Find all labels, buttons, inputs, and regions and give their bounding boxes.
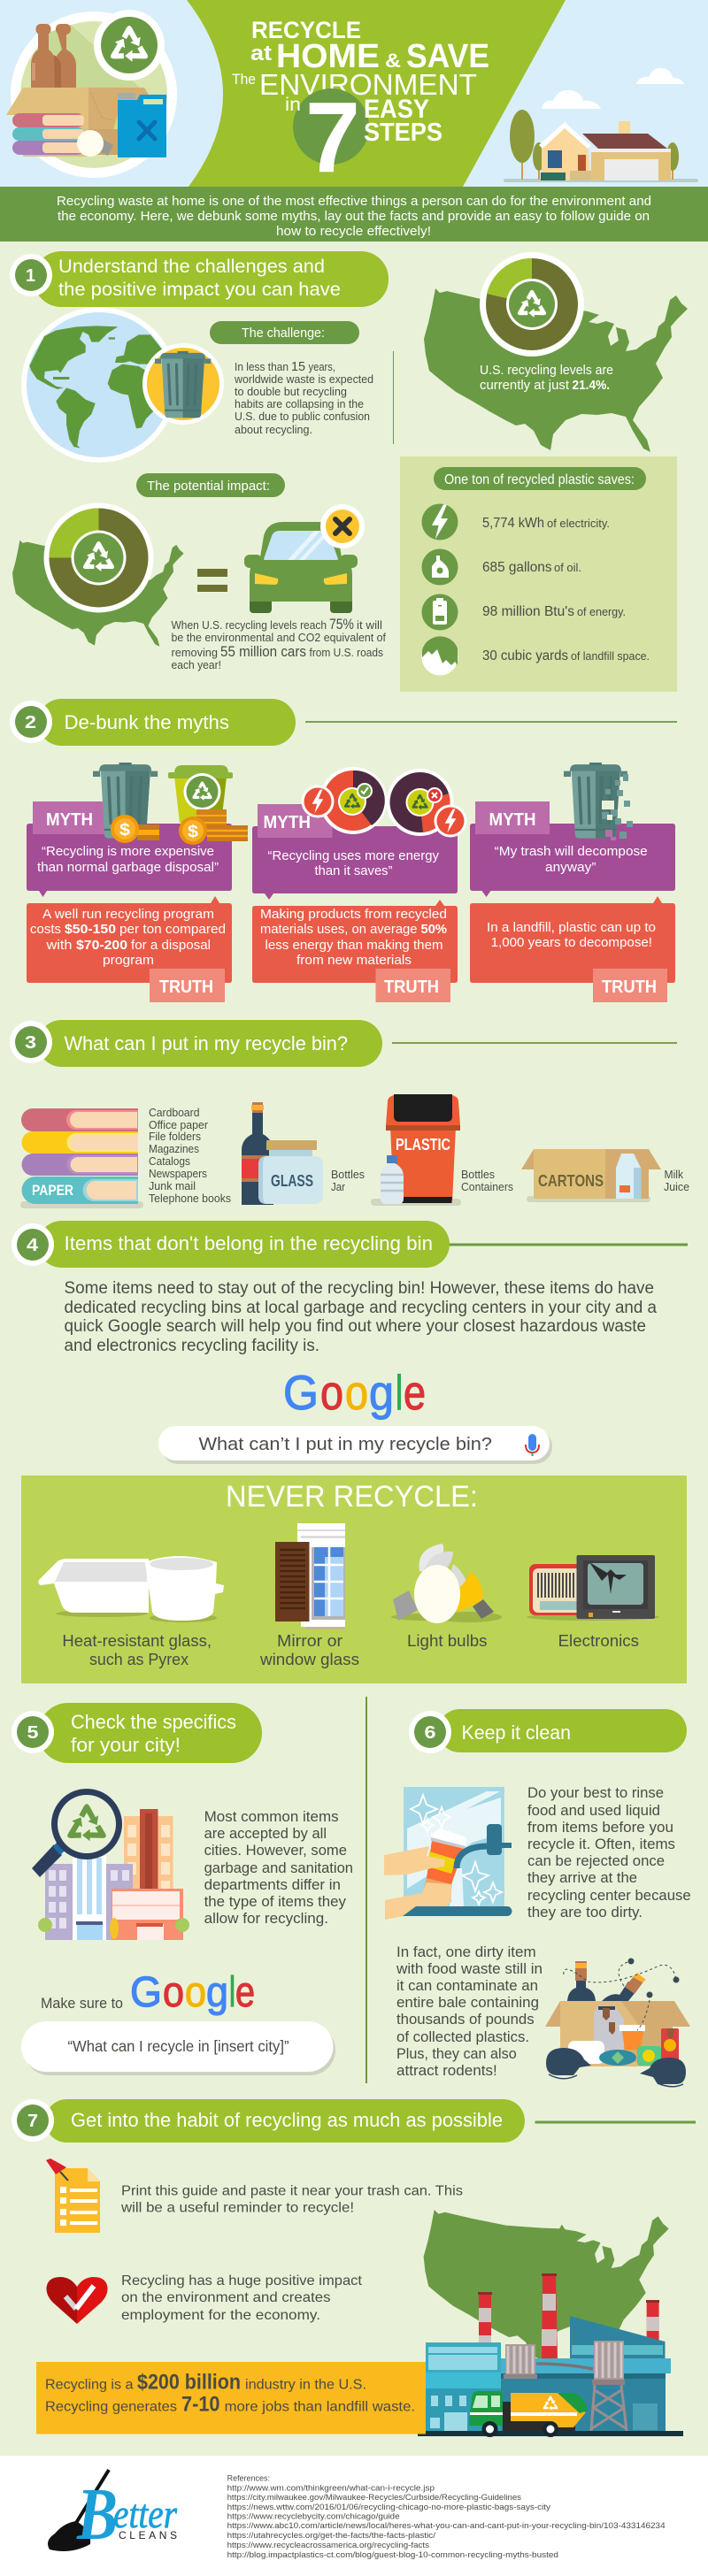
icon: landfill [421, 636, 458, 676]
glass list [331, 1168, 365, 1193]
stat lines: of landfill space. [571, 650, 650, 663]
US map with 21.4% donut [424, 252, 688, 452]
paper books [20, 1108, 143, 1208]
intro band [0, 187, 708, 242]
section 6 heading: Keep it clean [462, 1721, 571, 1744]
factory [418, 2273, 683, 2436]
section 1 heading: Understand the challenges and [58, 257, 325, 277]
section 7 heading: 7 [27, 2112, 38, 2131]
myth card 3 [470, 763, 675, 897]
title: EASY [364, 95, 429, 124]
truth card 2: Making products from recycled [260, 907, 447, 922]
intro band: how to recycle effectively! [276, 225, 431, 239]
paper list: Catalogs [149, 1154, 190, 1168]
truth card 2: materials uses, on average [260, 922, 418, 937]
google logo [283, 1365, 426, 1420]
myth card 1: MYTH [46, 810, 93, 830]
references: https://www.abc10.com/article/news/local/heres-what-you-can-and-cant-put-in-your-recycling-bin/103-433146234 [227, 2521, 666, 2531]
challenge text: about recycling. [235, 424, 312, 436]
title: SAVE [406, 38, 489, 75]
intro band: the economy. Here, we debunk some myths, lay out the facts and provide an easy to follow guide on [58, 210, 650, 224]
google logo: o [320, 1365, 343, 1420]
reminder text: will be a useful reminder to recycle! [120, 2201, 354, 2215]
myth card 2 [252, 767, 467, 900]
yellow stat bar: Recycling generates [45, 2400, 177, 2415]
section 5 text: cities. However, some [204, 1842, 347, 1859]
icon: trash can and coins [93, 763, 159, 843]
section 6 first text: they arrive at the [527, 1869, 637, 1886]
references: https://news.wttw.com/2016/01/06/recycling-chicago-no-more-plastic-bags-says-city [227, 2503, 550, 2512]
truth card 2: from new materials [296, 953, 412, 968]
truth card 3: In a landfill, plastic can up to [487, 920, 656, 935]
google logo: G [283, 1365, 319, 1420]
caption labels: window glass [259, 1651, 359, 1668]
logo: Better Cleans [48, 2470, 178, 2556]
section 5 text: are accepted by all [204, 1825, 327, 1842]
truth card 1: A well run recycling program [42, 907, 214, 922]
caption labels: Light bulbs [407, 1632, 487, 1650]
truth card 1: with [45, 938, 73, 953]
google logo small: g [206, 1969, 228, 2016]
potential impact text: When U.S. recycling levels reach [172, 618, 327, 632]
potential impact text: it will [357, 618, 382, 632]
section 6 second text: Plus, they can also [396, 2045, 517, 2062]
plastic bin [371, 1094, 461, 1206]
logo: Better Cleans: B [76, 2473, 118, 2556]
plastic list: Bottles [461, 1168, 495, 1181]
references: http://blog.impactplastics-ct.com/blog/guest-blog-10-common-recycling-myths-busted [227, 2550, 558, 2560]
section 6 second text: of collected plastics. [396, 2028, 529, 2045]
potential impact pill: The potential impact: [147, 479, 270, 494]
truth card 3: TRUTH [602, 978, 657, 997]
panel: one ton saves [400, 456, 677, 692]
section 5 text: allow for recycling. [204, 1910, 328, 1927]
title: in [285, 95, 301, 115]
icon: light bulbs [391, 1544, 502, 1623]
section 6 second text: In fact, one dirty item [396, 1944, 536, 1960]
section 2 heading: 2 [25, 713, 36, 732]
google logo small: o [163, 1969, 184, 2016]
section 5 heading: for your city! [71, 1734, 181, 1756]
impact text: employment for the economy. [121, 2308, 320, 2323]
challenge text: In less than [235, 361, 289, 373]
impact text [121, 2273, 363, 2323]
reminder text [120, 2183, 463, 2215]
section 1 heading: 1 [26, 266, 35, 286]
section 6 first text: can be rejected once [527, 1852, 665, 1869]
yellow stat bar: $200 billion [137, 2371, 241, 2394]
icon: electricity [421, 504, 458, 540]
section 3 heading: What can I put in my recycle bin? [64, 1032, 348, 1054]
car icon with X badge [244, 504, 365, 613]
paper list: Office paper [149, 1118, 209, 1131]
myth card 3: anyway” [545, 860, 596, 875]
logo: Better Cleans: etter [113, 2491, 178, 2536]
section 6 first text: they are too dirty. [527, 1904, 643, 1920]
paper list: Junk mail [149, 1179, 196, 1192]
truth card 1: $50-150 [65, 922, 116, 937]
section 6 second text: with food waste still in [396, 1960, 543, 1977]
caption labels: Mirror or [277, 1632, 342, 1650]
myth card 2: than it saves” [315, 863, 393, 878]
stat lines: 98 million Btu's [482, 604, 574, 619]
paper list: File folders [149, 1130, 201, 1143]
footer [0, 2456, 708, 2576]
cartons box [521, 1149, 661, 1202]
stat lines: 30 cubic yards [482, 648, 568, 663]
section 7 heading: Get into the habit of recycling as much as possible [71, 2109, 503, 2131]
the challenge pill [210, 321, 359, 344]
section 6 second text: thousands of pounds [396, 2011, 535, 2028]
title: 7 [305, 81, 360, 193]
section 6 first text [527, 1784, 691, 1920]
challenge text: worldwide waste is expected [234, 373, 373, 386]
potential impact text: 55 million cars [220, 643, 306, 660]
title: STEPS [364, 119, 442, 147]
section 6 first text: food and used liquid [527, 1802, 660, 1819]
stat lines: of electricity. [547, 518, 610, 530]
truth card 1: program [103, 953, 154, 968]
illustration: rinsing cup [384, 1787, 512, 1920]
potential impact text: from U.S. roads [310, 646, 383, 659]
search box: What can’t I put in my recycle bin? [198, 1435, 492, 1454]
section 4 heading: Items that don't belong in the recycling bin [64, 1232, 433, 1254]
section 2 heading [10, 699, 296, 746]
panel: one ton saves: One ton of recycled plastic saves: [444, 472, 635, 487]
globe with trash can [21, 307, 224, 463]
paper list [149, 1106, 231, 1205]
google logo: o [345, 1365, 368, 1420]
logo: Better Cleans: CLEANS [119, 2529, 177, 2542]
truth card 2: less energy than making them [266, 938, 442, 953]
stat lines: of oil. [554, 562, 581, 574]
section 5 text: Most common items [204, 1808, 339, 1825]
caption labels: Heat-resistant glass, [62, 1632, 212, 1650]
plastic bin: PLASTIC [396, 1136, 450, 1154]
yellow stat bar: more jobs than landfill waste. [225, 2400, 415, 2415]
US map with 21.4% donut: U.S. recycling levels are [480, 363, 613, 378]
section 6 second text: attract rodents! [396, 2062, 497, 2079]
panel: never recycle: NEVER RECYCLE: [226, 1480, 478, 1514]
references: https://utahrecycles.org/get-the-facts/the-facts-plastic/ [227, 2531, 435, 2541]
section 4 text: Some items need to stay out of the recycling bin! However, these items do have [64, 1279, 654, 1298]
potential impact text: each year! [172, 658, 221, 671]
header [0, 0, 708, 193]
city search box [21, 2021, 335, 2075]
section 5 text: the type of items they [204, 1893, 346, 1910]
city search box: “What can I recycle in [insert city]” [67, 2037, 289, 2055]
section 5 text: departments differ in [204, 1876, 341, 1893]
icon: microphone [526, 1434, 539, 1456]
truth card 1: per ton compared [119, 922, 226, 937]
myth card 1: than normal garbage disposal” [37, 860, 219, 875]
make sure to google: Make sure to [41, 1995, 123, 2012]
cartons list [664, 1168, 689, 1193]
icon: battery [421, 594, 458, 630]
stat lines: of energy. [577, 606, 626, 618]
icon: pyrex glassware [38, 1556, 224, 1622]
section 5 heading: 5 [27, 1723, 39, 1743]
glass bottle and jar: GLASS [271, 1172, 313, 1190]
icon: oil [421, 548, 458, 586]
section 5 text [204, 1808, 353, 1927]
references: http://www.wm.com/thinkgreen/what-can-i-recycle.jsp [227, 2484, 435, 2493]
section 4 text: dedicated recycling bins at local garbage and recycling centers in your city and a [64, 1299, 657, 1317]
yellow stat bar [36, 2362, 426, 2434]
reminder text: Print this guide and paste it near your trash can. This [121, 2183, 463, 2199]
icon: heart with check [46, 2277, 108, 2324]
paper list: Magazines [149, 1142, 199, 1155]
section 5 heading: Check the specifics [71, 1711, 236, 1733]
impact text: Recycling has a huge positive impact [121, 2273, 363, 2288]
section 6 heading: 6 [425, 1723, 435, 1743]
illustration: recyclables [6, 10, 177, 178]
stat lines: 685 gallons [482, 560, 552, 575]
section 5 heading [12, 1703, 262, 1763]
cartons list: Milk [664, 1168, 683, 1181]
title: The [232, 71, 256, 88]
icon: radio and broken TV [527, 1555, 659, 1621]
potential impact text [172, 616, 386, 671]
truth card 1: $70-200 [76, 938, 127, 953]
intro band: Recycling waste at home is one of the most effective things a person can do for the environment and [57, 195, 651, 209]
challenge text: 15 [291, 359, 305, 374]
section 4 heading [12, 1221, 688, 1268]
paper list: Newspapers [149, 1167, 207, 1180]
caption labels: Electronics [558, 1632, 639, 1650]
illustration: city under magnifier [32, 1789, 189, 1940]
stat lines [482, 516, 650, 663]
plastic list: Containers [461, 1180, 513, 1193]
yellow stat bar: industry in the U.S. [245, 2378, 366, 2392]
US map with 21.4% donut: 21.4%. [572, 378, 610, 393]
challenge text: years, [308, 361, 335, 373]
section 6 second text: entire bale containing [396, 1994, 539, 2011]
challenge text [234, 359, 373, 436]
title [232, 17, 489, 193]
section 6 heading [409, 1709, 687, 1753]
myth card 2: “Recycling uses more energy [267, 848, 439, 863]
section 1 heading [10, 251, 389, 307]
section 4 heading: 4 [27, 1236, 39, 1255]
garbage truck [469, 2391, 588, 2437]
section 4 text [64, 1279, 657, 1355]
truth card 3: 1,000 years to decompose! [491, 935, 652, 950]
equals sign [197, 569, 227, 592]
google logo: l [396, 1365, 403, 1420]
stat lines: 5,774 kWh [482, 516, 544, 531]
truth card 1: costs [30, 922, 61, 937]
illustration: dirty box with rats [545, 1959, 690, 2087]
glass bottle and jar [242, 1102, 323, 1205]
google logo small: e [235, 1969, 255, 2016]
title: at [250, 42, 272, 65]
US map and factory [418, 2210, 683, 2437]
references: https://www.recycleacrossamerica.org/recycling-facts [227, 2541, 429, 2550]
section 6 second text: it can contaminate an [396, 1977, 538, 1994]
cartons box: CARTONS [538, 1172, 604, 1190]
myth card 3: “My trash will decompose [495, 844, 648, 859]
potential impact text: removing [172, 646, 218, 659]
title: & [385, 50, 401, 72]
illustration: house and trees [504, 68, 698, 182]
icon: decomposing trash can [564, 763, 633, 840]
section 3 heading: 3 [25, 1033, 36, 1053]
section 6 first text: recycle it. Often, items [527, 1836, 675, 1852]
icon: trash can and coins: $ [119, 821, 130, 840]
potential impact text: be the environmental and CO2 equivalent of [172, 631, 386, 644]
title: RECYCLE [251, 17, 361, 43]
yellow stat bar: 7-10 [181, 2393, 219, 2417]
glass list: Jar [331, 1180, 346, 1193]
section 6 first text: recycling center because [527, 1887, 691, 1904]
section 3 heading [10, 1020, 382, 1067]
truth card 2 [252, 900, 458, 1002]
myth card 1 [27, 763, 248, 897]
impact text: on the environment and creates [121, 2290, 331, 2305]
truth card 2: 50% [421, 922, 447, 937]
challenge text: to double but recycling [235, 386, 347, 398]
caption labels: such as Pyrex [89, 1651, 189, 1668]
section 4 text: quick Google search will help you find out where your closest hazardous waste [64, 1317, 646, 1336]
references [227, 2473, 666, 2560]
google logo small [130, 1969, 255, 2016]
google logo: e [404, 1365, 426, 1420]
challenge text: U.S. due to public confusion [235, 410, 370, 423]
truth card 1: TRUTH [159, 978, 213, 997]
search box [158, 1426, 552, 1464]
panel: never recycle [21, 1476, 687, 1683]
myth card 1: “Recycling is more expensive [42, 844, 214, 859]
truth card 2: TRUTH [384, 978, 439, 997]
icon: recycling bin and coins: $ [188, 823, 198, 841]
icon: pinned checklist [46, 2158, 100, 2233]
yellow stat bar: Recycling is a [45, 2378, 134, 2392]
make sure to google [41, 1969, 255, 2016]
google logo: g [369, 1365, 394, 1420]
icon: recycling bin and coins [168, 765, 248, 845]
section 1 heading: the positive impact you can have [58, 280, 341, 300]
icon: window and shutter [275, 1523, 345, 1629]
google logo small: G [130, 1969, 162, 2016]
section 6 first text: from items before you [527, 1819, 673, 1836]
glass list: Bottles [331, 1168, 365, 1181]
myth card 3: MYTH [489, 810, 536, 830]
title: HOME [276, 38, 380, 75]
myth card 2: MYTH [264, 813, 311, 832]
title: ENVIRONMENT [259, 68, 477, 101]
challenge text: habits are collapsing in the [235, 398, 364, 410]
references: References: [227, 2473, 270, 2484]
truth card 1: for a disposal [131, 938, 211, 953]
paper list: Cardboard [149, 1106, 200, 1119]
plastic list [461, 1168, 513, 1193]
US map with 21.4% donut: currently at just [480, 378, 570, 393]
potential impact text: 75% [329, 616, 354, 632]
paper books: PAPER [32, 1182, 73, 1199]
references: https://www.recyclebycity.com/chicago/guide [227, 2512, 400, 2521]
section 4 text: and electronics recycling facility is. [64, 1337, 319, 1355]
cartons list: Juice [664, 1180, 689, 1193]
US map with 25% donut [12, 502, 184, 647]
references: https://city.milwaukee.gov/Milwaukee-Recycles/Curbside/Recycling-Guidelines [227, 2493, 521, 2503]
truth card 3 [470, 896, 675, 1002]
potential impact pill [136, 473, 285, 497]
section 6 second text [396, 1944, 543, 2079]
google logo small: o [185, 1969, 206, 2016]
section 5 text: garbage and sanitation [204, 1859, 353, 1876]
the challenge pill: The challenge: [242, 326, 325, 341]
google logo small: l [229, 1969, 235, 2016]
truth card 1 [27, 896, 232, 1002]
section 7 heading [12, 2099, 696, 2143]
section 6 first text: Do your best to rinse [527, 1784, 664, 1801]
icon: energy donuts [301, 767, 467, 837]
section 2 heading: De-bunk the myths [64, 711, 229, 733]
caption labels [62, 1632, 639, 1668]
paper list: Telephone books [149, 1192, 231, 1205]
